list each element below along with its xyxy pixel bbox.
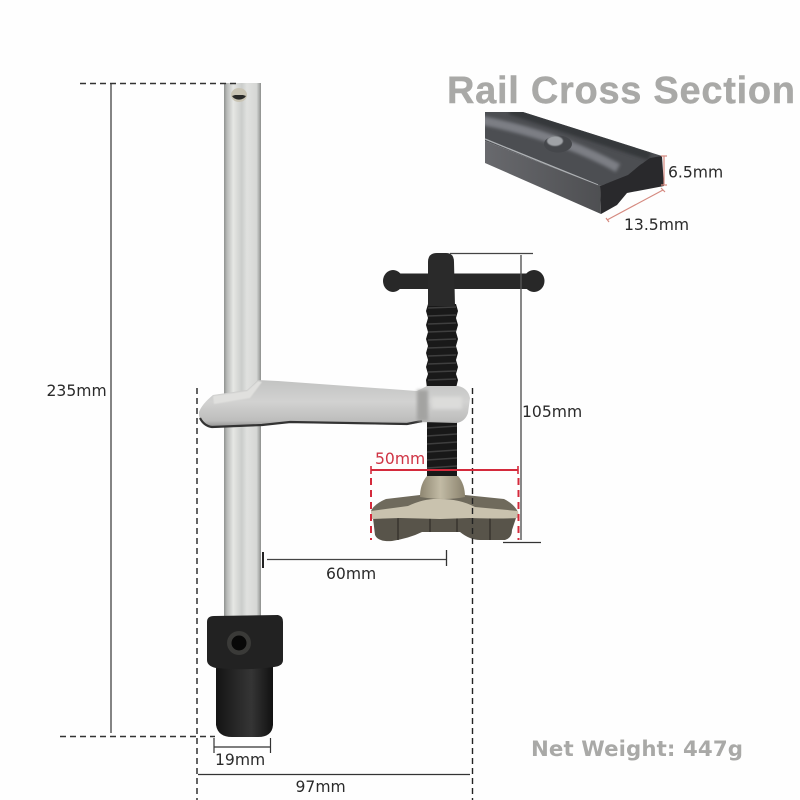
dimension: 19mm diameter (214, 738, 270, 769)
threaded screw with T-handle (383, 253, 544, 478)
dimension: 6.5mm rail height (661, 156, 723, 185)
screw lower thread (427, 418, 457, 478)
foot underside (373, 518, 516, 541)
net weight label: Net Weight: 447g (531, 737, 743, 762)
rail side face (485, 141, 601, 214)
rail cross-section photo (480, 110, 664, 214)
cast arm (199, 380, 470, 428)
screw upper thread (426, 304, 458, 388)
icon: rivet on rail (544, 136, 572, 152)
dimension: 105mm height: 105mm (522, 403, 582, 421)
dimension: 97mm overall width: 97mm (296, 778, 346, 796)
dimension: 13.5mm rail width: 13.5mm (624, 216, 689, 234)
foot light band (371, 499, 519, 519)
foot neck (420, 476, 465, 499)
dimension: 19mm diameter: 19mm (215, 751, 265, 769)
icon: rail top rivet (231, 88, 247, 102)
heading: Rail Cross Section: Rail Cross Section (447, 70, 795, 112)
icon: collar set-screw hole (227, 631, 251, 655)
screw head (428, 253, 455, 306)
lower black collar (207, 615, 283, 737)
main clamp rail (224, 83, 261, 618)
T-handle bar (383, 270, 544, 292)
rail top groove shading (480, 110, 650, 168)
dimension: 13.5mm rail width (606, 188, 689, 234)
dimension: 60mm reach: 60mm (326, 565, 376, 583)
dimension: 235mm height: 235mm (46, 382, 107, 400)
swivel foot pad (371, 476, 519, 541)
rail top surface (485, 112, 662, 186)
foot top plate (371, 495, 518, 518)
dimension: 50mm foot width (red) (371, 450, 518, 540)
rail end face (600, 156, 664, 214)
dimension: 50mm foot width (red): 50mm (375, 450, 425, 468)
dimension: 6.5mm rail height: 6.5mm (668, 164, 723, 182)
